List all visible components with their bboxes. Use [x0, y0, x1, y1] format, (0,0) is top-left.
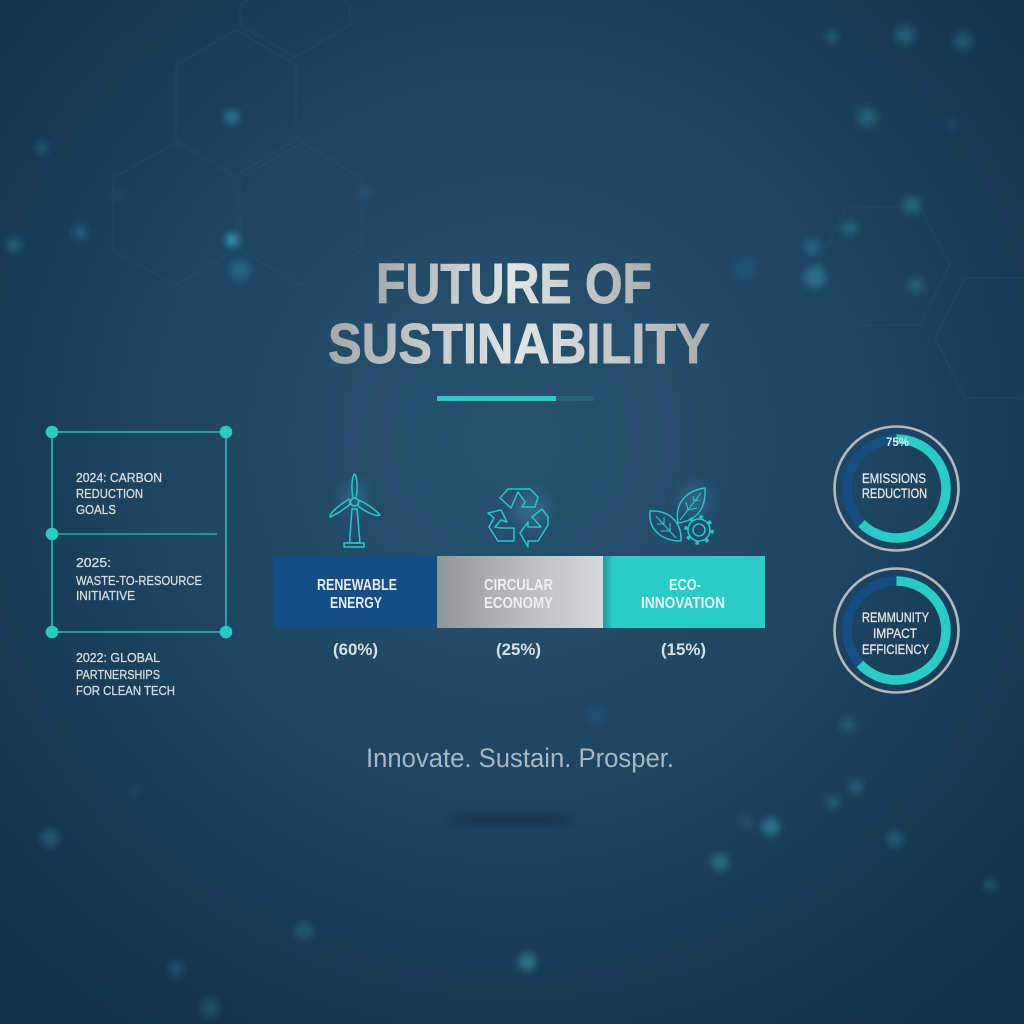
icon: recycle [488, 489, 548, 547]
bar: circular economy: ECONOMY [484, 595, 554, 612]
bar: eco-innovation: INNOVATION [641, 595, 725, 612]
percentage labels: (15%) [661, 641, 706, 659]
tagline shadow [448, 815, 572, 825]
timeline text: 2025: WASTE-TO-RESOURCE [76, 573, 202, 588]
icon: leaves and gear [650, 488, 712, 543]
percentage labels [333, 641, 706, 659]
bar: renewable energy [274, 556, 437, 628]
gauge: community impact efficiency: REMMUNITY [862, 610, 929, 625]
timeline text: 2025 [76, 555, 202, 603]
timeline text: 2024: REDUCTION [76, 486, 143, 501]
timeline text: 2024: GOALS [76, 502, 116, 517]
panel: timeline [46, 426, 232, 698]
gauge: emissions reduction: 75% [886, 435, 909, 449]
gauge: emissions reduction: EMISSIONS [862, 471, 926, 486]
gauge: emissions reduction [834, 426, 958, 550]
bar: circular economy: CIRCULAR [484, 577, 553, 594]
gauge: community impact efficiency [834, 568, 958, 692]
icon: wind turbine [330, 474, 380, 547]
title underline [437, 396, 594, 401]
gauge: community impact efficiency: EFFICIENCY [862, 642, 929, 657]
timeline text: 2022: PARTNERSHIPS [76, 667, 160, 682]
gauge: emissions reduction: REDUCTION [862, 486, 927, 501]
timeline text: 2024 [76, 470, 162, 517]
percentage labels: (25%) [496, 641, 541, 659]
bar: circular economy [437, 556, 603, 628]
title [328, 252, 710, 376]
title: FUTURE OF [376, 252, 652, 316]
bar: eco-innovation: ECO- [669, 577, 701, 594]
timeline text: 2022 [76, 650, 175, 698]
percentage labels: (60%) [333, 641, 378, 659]
title: SUSTINABILITY [328, 312, 710, 376]
gauge: community impact efficiency: IMPACT [873, 626, 917, 641]
bar: eco-innovation [603, 556, 765, 628]
timeline text: 2022: 2022: GLOBAL [76, 650, 160, 665]
timeline text: 2025: INITIATIVE [76, 588, 135, 603]
timeline frame [46, 426, 232, 638]
bar: renewable energy: ENERGY [330, 595, 383, 612]
tagline: Innovate. Sustain. Prosper. [366, 743, 674, 773]
bar: renewable energy: RENEWABLE [317, 577, 397, 594]
timeline text: 2025: 2025: [76, 555, 111, 570]
timeline text: 2022: FOR CLEAN TECH [76, 683, 175, 698]
timeline text: 2024: 2024: CARBON [76, 470, 162, 485]
